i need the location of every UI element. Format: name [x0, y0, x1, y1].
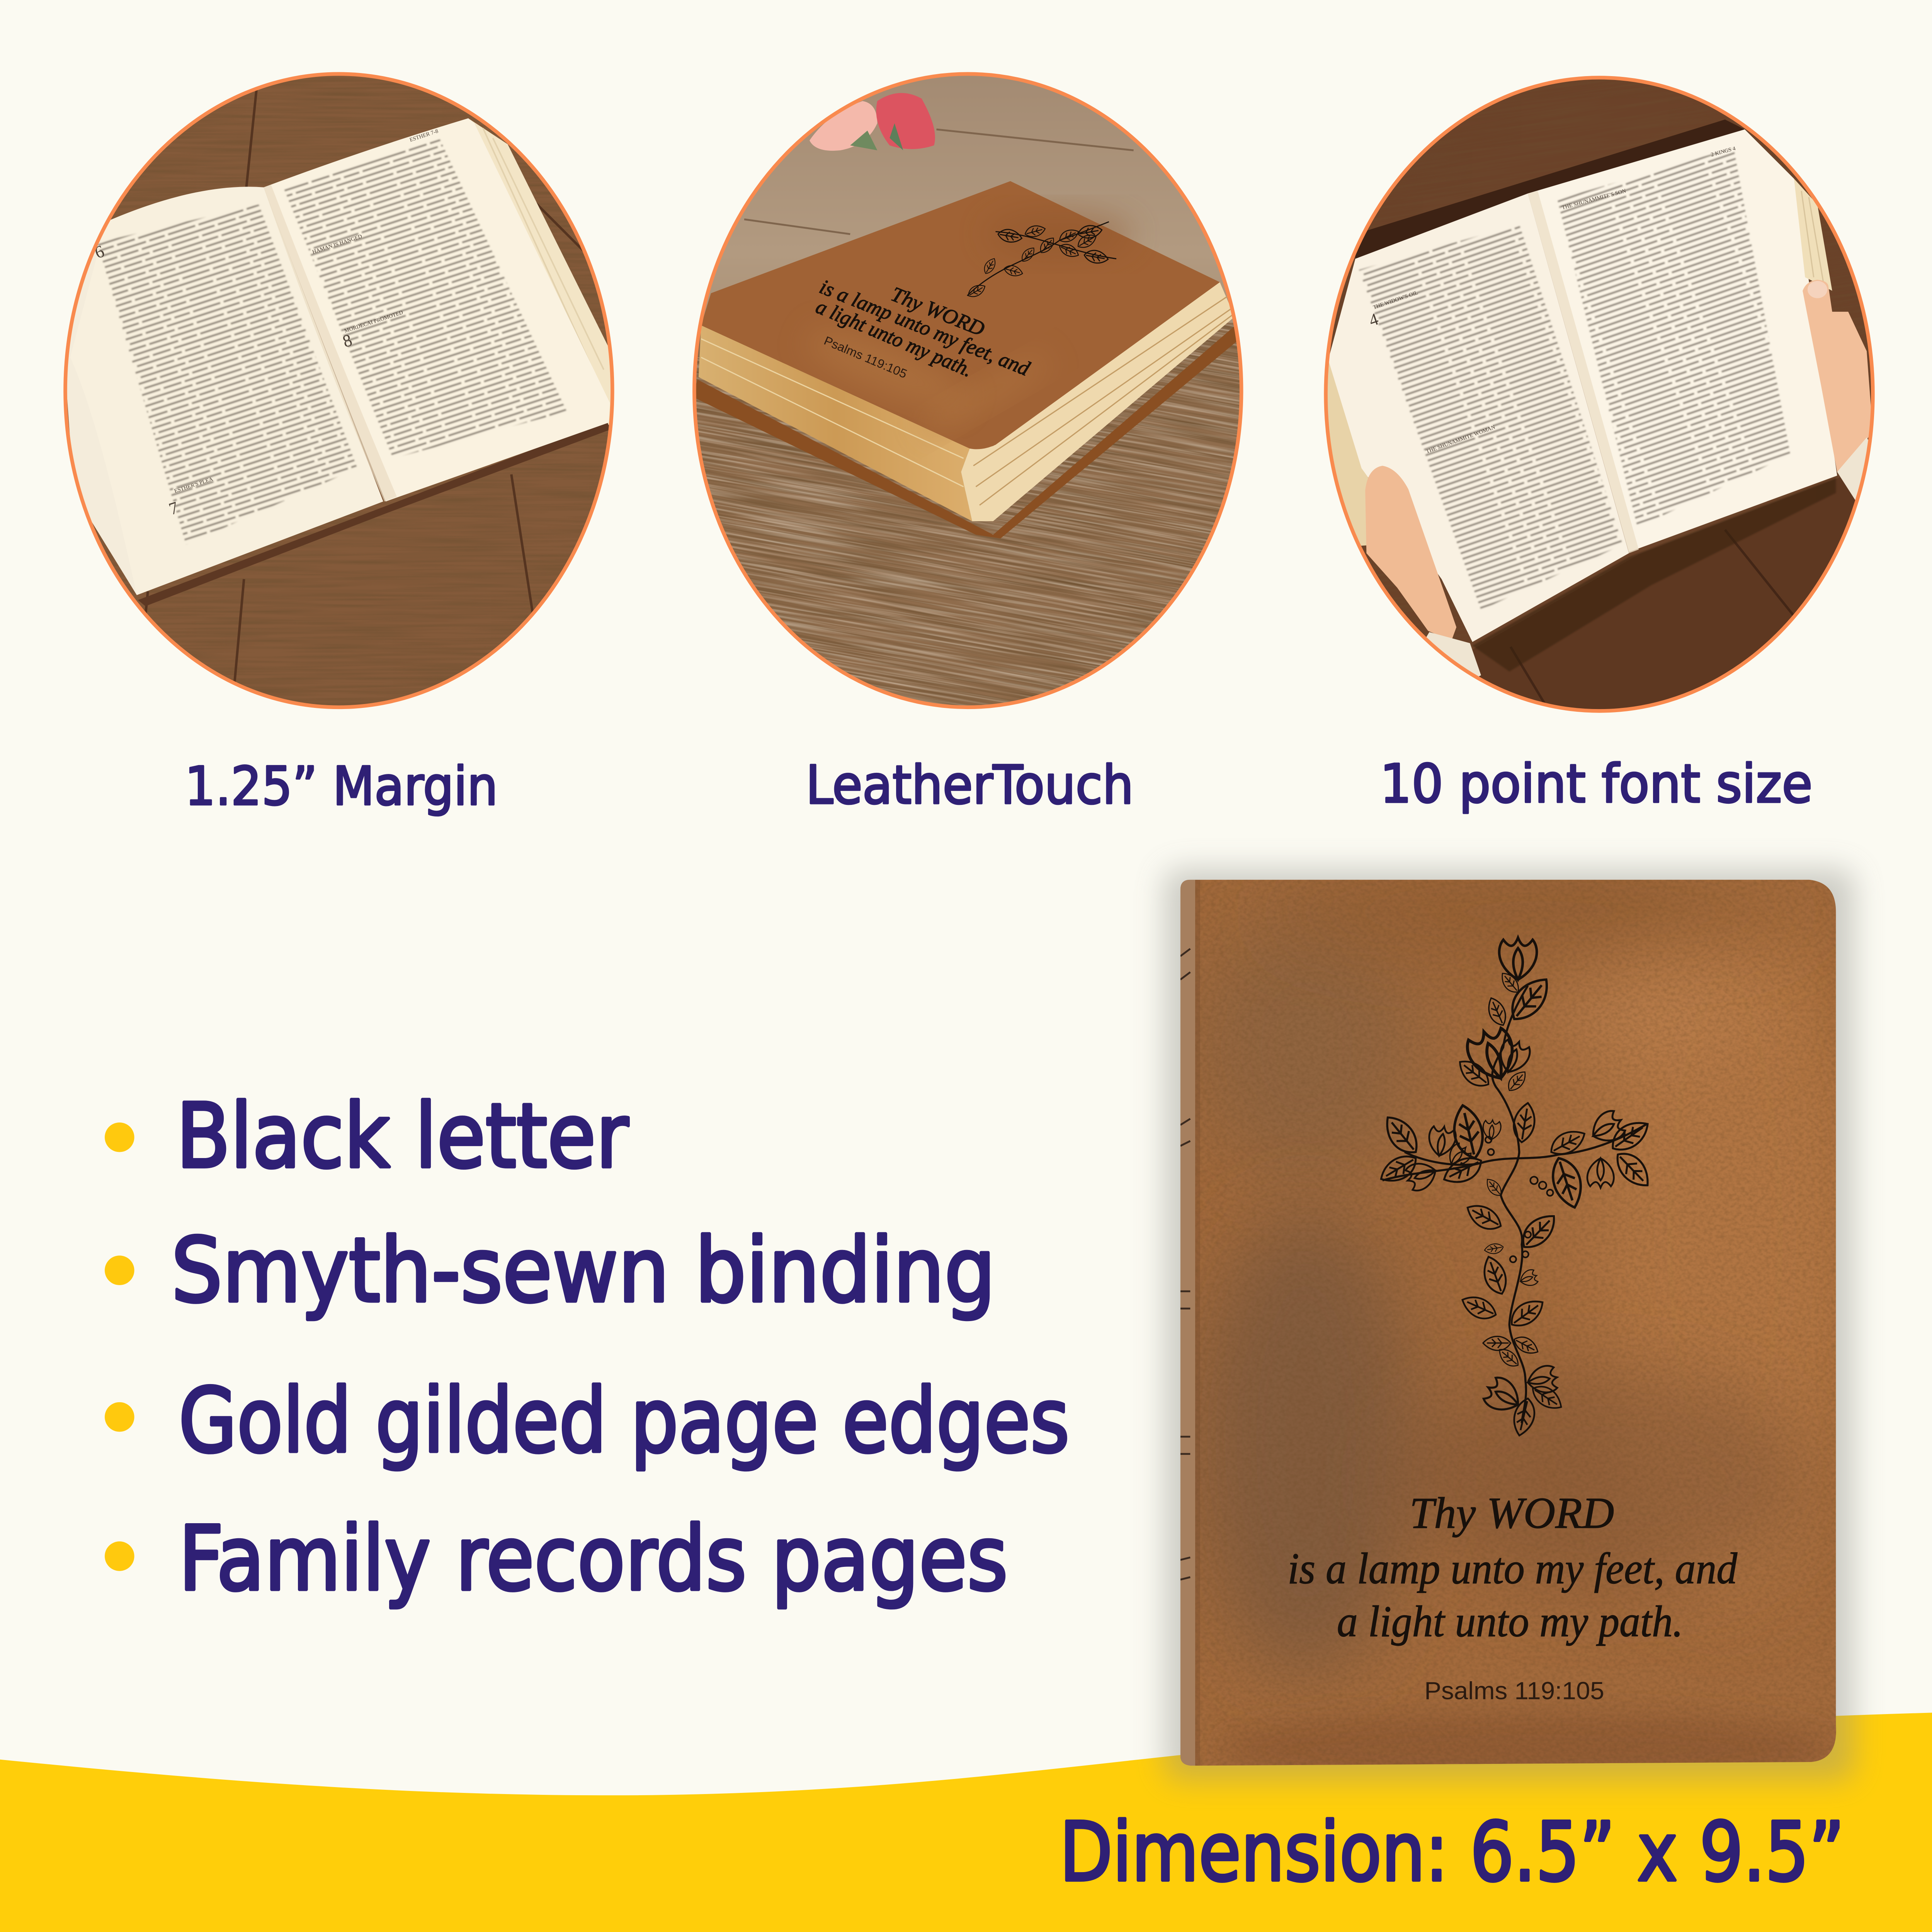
bullet: family records: Family records pages — [179, 1508, 1008, 1611]
panel: hands holding open Bible: THE SHUNAMMITE WOMAN — [1425, 424, 1496, 455]
text: engraved verse — [1287, 1488, 1738, 1704]
label: font size: 10 point font size — [1380, 753, 1813, 815]
panel: open Bible showing margin: ESTHER'S PLEA — [173, 476, 214, 494]
panel: open Bible showing margin: 7 — [167, 498, 181, 519]
bullet: black letter: Black letter — [176, 1085, 629, 1188]
panel: open Bible showing margin — [61, 68, 616, 714]
bullet: binding: Smyth-sewn binding — [171, 1219, 996, 1322]
icon: right hand — [1803, 280, 1885, 507]
text: engraved verse: Psalms 119:105 — [1424, 1677, 1604, 1704]
panel: hands holding open Bible: 2 KINGS 4 — [1710, 145, 1736, 158]
spine — [1180, 880, 1200, 1767]
icon: fabric roses — [810, 93, 935, 151]
panel: hands holding open Bible: THE WIDOW'S OIL — [1372, 289, 1419, 311]
bullet: page edges: Gold gilded page edges — [179, 1369, 1070, 1473]
panel: hands holding open Bible — [1277, 38, 1922, 757]
text: cover verse in perspective: a light unto my path. — [813, 295, 976, 381]
label: margin: 1.25” Margin — [185, 756, 498, 817]
feature list — [105, 1085, 1070, 1611]
panel: open Bible showing margin: 6 — [92, 241, 107, 262]
text: cover verse in perspective: Psalms 119:105 — [822, 333, 909, 381]
text: cover verse in perspective: is a lamp unto my feet, and — [816, 275, 1033, 381]
panel: open Bible showing margin: HAMAN IS HANGED — [311, 233, 363, 255]
icon: left hand — [1365, 466, 1481, 690]
panel: open Bible showing margin: MORDECAI PROMOTED — [344, 309, 404, 334]
icon: floral cross — [1376, 938, 1656, 1438]
leather Bible cover — [1164, 862, 1861, 1787]
text: engraved verse: a light unto my path. — [1337, 1597, 1683, 1646]
text: engraved verse: Thy WORD — [1410, 1488, 1614, 1537]
text: engraved verse: is a lamp unto my feet, and — [1287, 1544, 1738, 1593]
yellow wave footer — [0, 1713, 1932, 1932]
panel: hands holding open Bible: 4 — [1366, 309, 1381, 330]
icon: small floral cross on cover — [966, 222, 1116, 300]
text: cover verse in perspective: Thy WORD — [888, 282, 988, 341]
label: LeatherTouch: LeatherTouch — [806, 755, 1134, 816]
panel: open Bible showing margin: 8 — [340, 330, 354, 351]
panel: hands holding open Bible: THE SHUNAMMITE'S SON — [1561, 188, 1627, 211]
panel: open Bible showing margin: ESTHER 7-8 — [409, 128, 439, 143]
panel: LeatherTouch cover photo — [546, 68, 1396, 876]
